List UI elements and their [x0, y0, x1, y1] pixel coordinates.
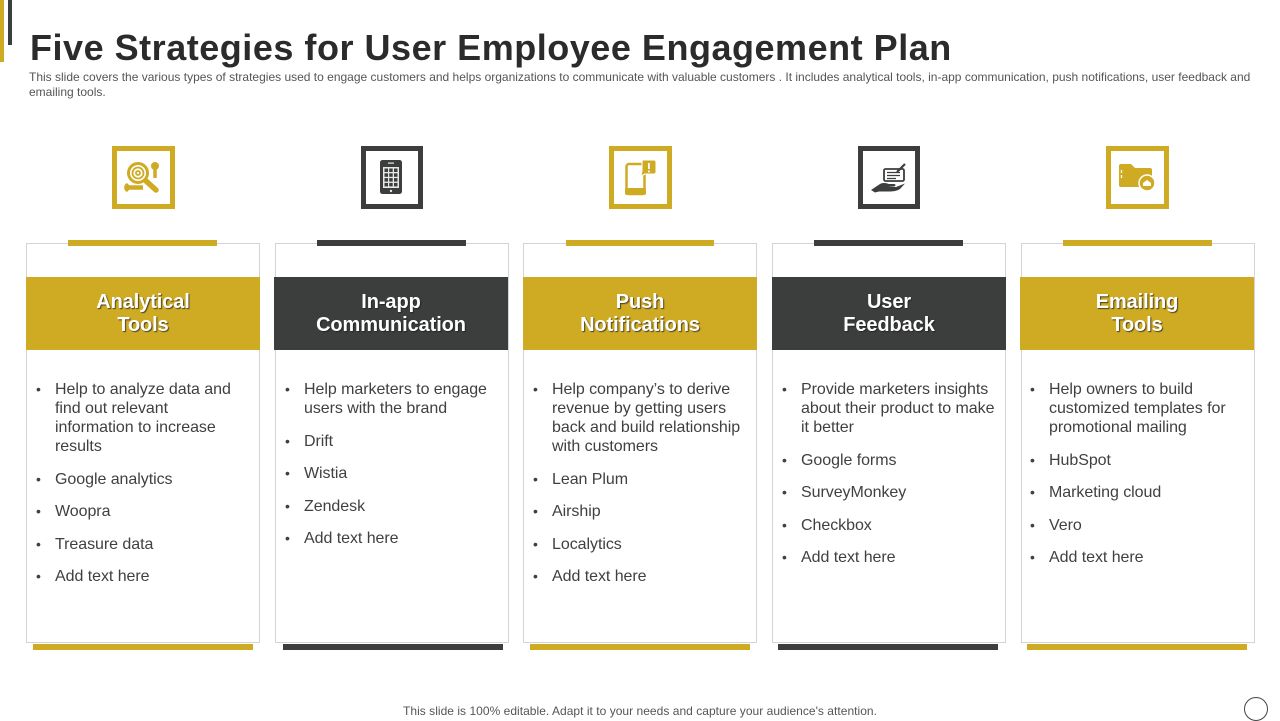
- heading: user feedback: User: [867, 291, 911, 313]
- description text: This slide covers the various types of strategies used to engage customers and helps organizations to communicate with valuable customers . It includes analytical tools, in-app communication, push notifications, user feedback and: [29, 70, 1250, 84]
- heading: emailing tools: [1020, 277, 1254, 350]
- bullet list: Add text here: [55, 568, 150, 585]
- accent bar: gold: [0, 0, 4, 62]
- heading: user feedback: [772, 277, 1006, 350]
- bullet list: Localytics: [552, 536, 622, 552]
- icon: folder with badge: [1106, 146, 1169, 209]
- bullet list: Google analytics: [55, 470, 172, 488]
- accent bar: dark: [8, 0, 12, 45]
- icon: hand holding feedback form: [858, 146, 920, 209]
- bullet list: revenue by getting users: [552, 400, 726, 417]
- bullet list: customized templates for: [1049, 400, 1226, 417]
- bottom accent bar: [530, 644, 750, 650]
- bottom accent bar: [283, 644, 503, 650]
- bullet list: [36, 381, 231, 585]
- bottom accent bar: [1027, 644, 1247, 650]
- bullet list: Add text here: [1049, 549, 1144, 566]
- panel: emailing tools: [1020, 146, 1255, 650]
- bullet list: Treasure data: [55, 536, 153, 552]
- bullet list: Drift: [304, 432, 333, 450]
- bullet list: it better: [801, 419, 854, 436]
- title: Five Strategies for User Employee Engagement Plan: [30, 27, 952, 68]
- icon: smartphone with app grid: [361, 146, 423, 209]
- heading: push notifications: [523, 277, 757, 350]
- bullet list: with customers: [552, 438, 658, 455]
- bullet list: information to increase: [55, 419, 216, 436]
- bullet list: back and build relationship: [552, 419, 740, 436]
- card outline: [1021, 243, 1255, 643]
- bullet list: Woopra: [55, 503, 110, 520]
- heading: analytical tools: Analytical: [96, 291, 190, 313]
- panel: user feedback: [772, 146, 1006, 650]
- circle badge: [1244, 697, 1268, 721]
- heading: push notifications: Push: [616, 291, 664, 313]
- bullet list: SurveyMonkey: [801, 484, 906, 501]
- bullet list: [286, 381, 487, 547]
- bullet list: [782, 381, 994, 566]
- heading: in-app communication: [274, 277, 508, 350]
- card outline: [26, 243, 260, 643]
- bottom accent bar: [33, 644, 253, 650]
- panel: analytical tools: [26, 146, 260, 650]
- bullet list: find out relevant: [55, 400, 168, 417]
- bullet list: Marketing cloud: [1049, 484, 1161, 501]
- bullet list: Google forms: [801, 452, 896, 468]
- bullet list: Wistia: [304, 465, 347, 482]
- card outline: [523, 243, 757, 643]
- bullet list: Provide marketers insights: [801, 381, 988, 398]
- heading: analytical tools: [26, 277, 260, 350]
- bullet list: Checkbox: [801, 516, 872, 534]
- bullet list: users with the brand: [304, 400, 447, 417]
- top accent bar: [814, 240, 963, 246]
- bullet list: Help marketers to engage: [304, 381, 487, 398]
- icon: phone with alert bubble: [609, 146, 672, 209]
- bottom accent bar: [778, 644, 998, 650]
- heading: push notifications: Notifications: [580, 314, 700, 336]
- top accent bar: [566, 240, 714, 246]
- bullet list: Help company’s to derive: [552, 381, 730, 398]
- bullet list: HubSpot: [1049, 452, 1111, 468]
- heading: emailing tools: Emailing: [1096, 291, 1178, 313]
- top accent bar: [1063, 240, 1212, 246]
- bullet list: Add text here: [552, 568, 647, 585]
- bullet list: Lean Plum: [552, 470, 628, 488]
- heading: analytical tools: Tools: [117, 314, 169, 336]
- bullet list: Help to analyze data and: [55, 381, 231, 398]
- heading: in-app communication: Communication: [316, 314, 466, 336]
- description text: emailing tools.: [29, 84, 106, 98]
- bullet list: Help owners to build: [1049, 381, 1193, 398]
- bullet list: Add text here: [304, 530, 399, 547]
- panel: push notifications: [523, 146, 757, 650]
- bullet list: Add text here: [801, 549, 896, 566]
- bullet list: [1030, 381, 1226, 566]
- heading: emailing tools: Tools: [1111, 314, 1163, 336]
- footer note: This slide is 100% editable. Adapt it to your needs and capture your audience's attention.: [403, 704, 877, 718]
- description text: [29, 70, 1250, 98]
- panel: in-app communication: [274, 146, 509, 650]
- bullet list: Zendesk: [304, 498, 365, 514]
- bullet list: about their product to make: [801, 400, 994, 417]
- card outline: [275, 243, 509, 643]
- bullet list: [534, 381, 740, 585]
- bullet list: promotional mailing: [1049, 419, 1187, 436]
- bullet list: Vero: [1049, 516, 1082, 534]
- icon: target with magnifier and tools: [112, 146, 175, 209]
- heading: in-app communication: In-app: [361, 291, 421, 313]
- bullet list: results: [55, 438, 102, 455]
- heading: user feedback: Feedback: [843, 314, 935, 336]
- top accent bar: [68, 240, 217, 246]
- card outline: [772, 243, 1006, 643]
- bullet list: Airship: [552, 503, 601, 520]
- top accent bar: [317, 240, 466, 246]
